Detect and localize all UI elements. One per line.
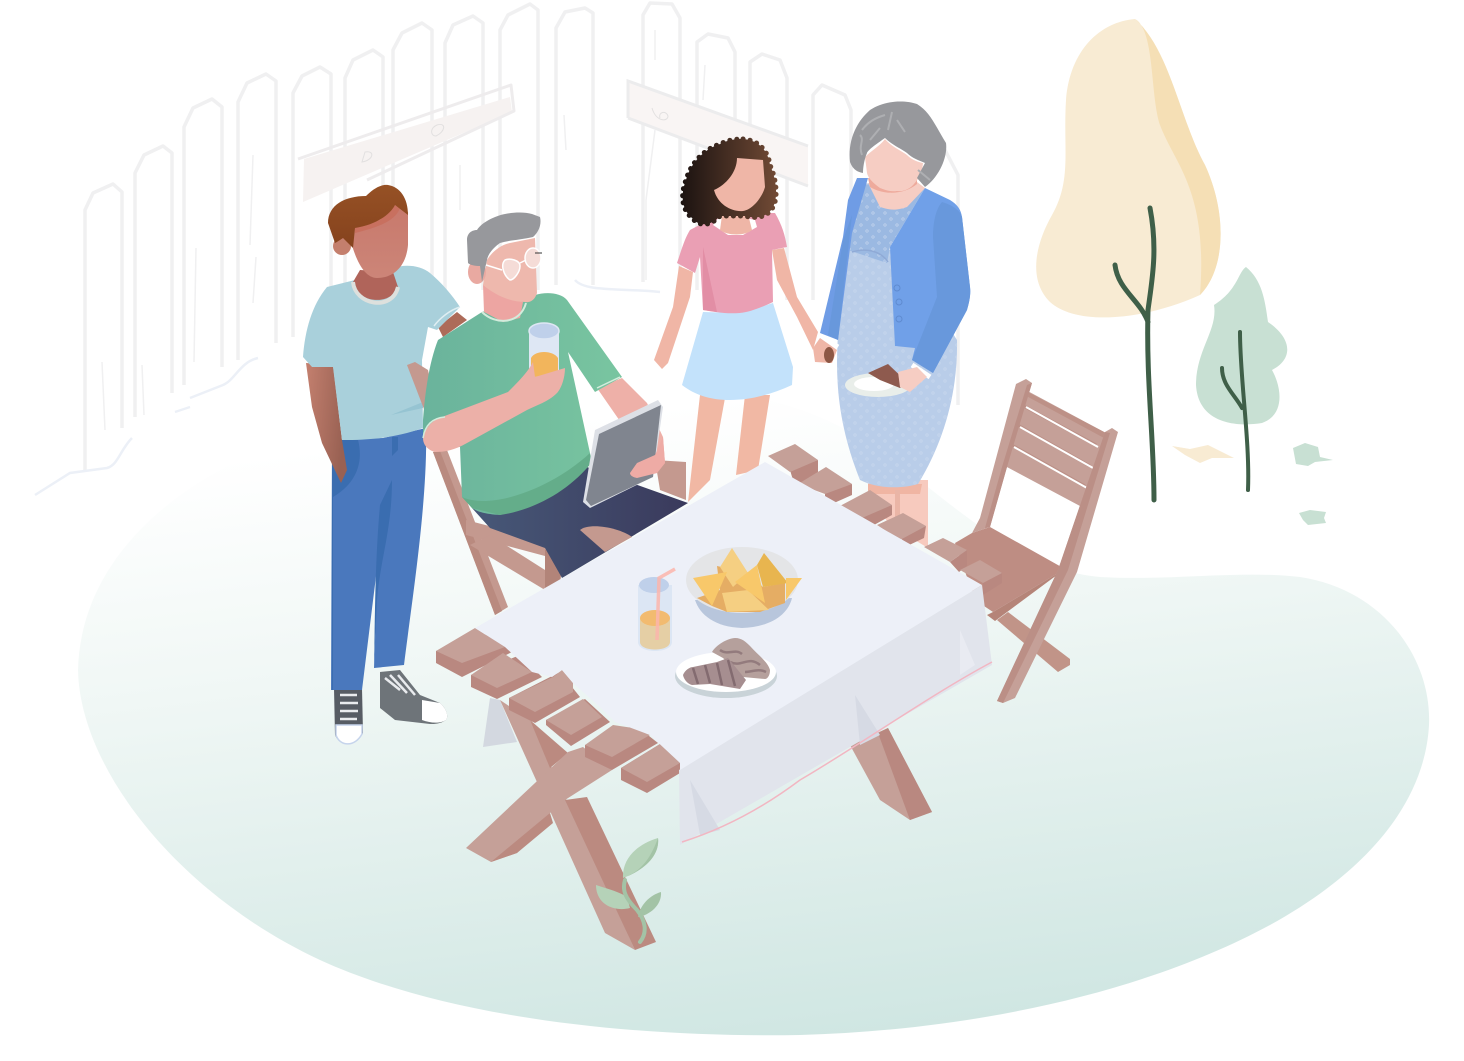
- boy back forearm: [438, 312, 467, 337]
- boy arm: [306, 363, 347, 483]
- man's face: [483, 238, 537, 302]
- woman legs: [868, 480, 928, 548]
- boy face: [350, 205, 408, 278]
- glass in hand: [529, 323, 559, 377]
- chair lower leg: [997, 612, 1070, 672]
- man's hair: [467, 212, 541, 282]
- front bench slats: [436, 628, 680, 793]
- chair left post: [972, 379, 1032, 533]
- leaves on ground: [1172, 443, 1333, 525]
- far leg: [850, 728, 932, 820]
- woman neck and face: [868, 182, 925, 210]
- right chair: [955, 379, 1118, 703]
- ground blob: [78, 384, 1429, 1035]
- girl legs: [688, 395, 725, 502]
- chair seat: [955, 527, 1065, 612]
- small tree: [1196, 267, 1287, 490]
- girl arms: [654, 266, 693, 369]
- woman in blue cardigan: [818, 102, 970, 548]
- seated man in green: [423, 212, 688, 578]
- green shirt: [423, 293, 622, 515]
- boy hair: [328, 185, 408, 248]
- boy neck and collar: [353, 270, 398, 300]
- plate held by woman: [845, 364, 927, 397]
- tablecloth: [475, 462, 992, 845]
- skirt: [682, 303, 793, 400]
- glasses: [486, 248, 542, 280]
- man's neck: [483, 285, 523, 322]
- man's back arm: [597, 378, 665, 478]
- girl face: [714, 158, 765, 211]
- blue t-shirt: [303, 266, 460, 440]
- bowl of chips: [686, 547, 802, 628]
- crossing leg: [466, 747, 612, 862]
- man's trousers: [472, 467, 688, 578]
- girl in pink: [654, 139, 818, 502]
- near leg going down right: [500, 700, 635, 950]
- cardigan: [820, 178, 868, 340]
- woman hair: [850, 102, 946, 187]
- pink shirt: [677, 213, 787, 313]
- back bench slats: [768, 444, 1002, 595]
- seated man's chair: [407, 362, 686, 615]
- man's front arm: [423, 362, 565, 452]
- plant sprout: [596, 838, 661, 942]
- under cloth flap: [483, 698, 517, 747]
- fence planks: [35, 30, 808, 495]
- picnic table legs: [466, 700, 932, 950]
- glass of juice on table: [638, 569, 675, 651]
- girl hair: [683, 139, 776, 224]
- collar and neck: [713, 213, 757, 235]
- chair right post: [997, 428, 1118, 703]
- standing boy: [303, 185, 467, 744]
- dress: [837, 250, 957, 487]
- fence: [85, 3, 958, 470]
- tablet: [583, 400, 665, 508]
- sneakers: [380, 670, 447, 724]
- chair back slats: [1005, 388, 1106, 506]
- plate with food: [675, 638, 777, 698]
- large tree: [1036, 19, 1221, 500]
- jeans: [331, 428, 426, 690]
- clasped hands: [813, 338, 837, 363]
